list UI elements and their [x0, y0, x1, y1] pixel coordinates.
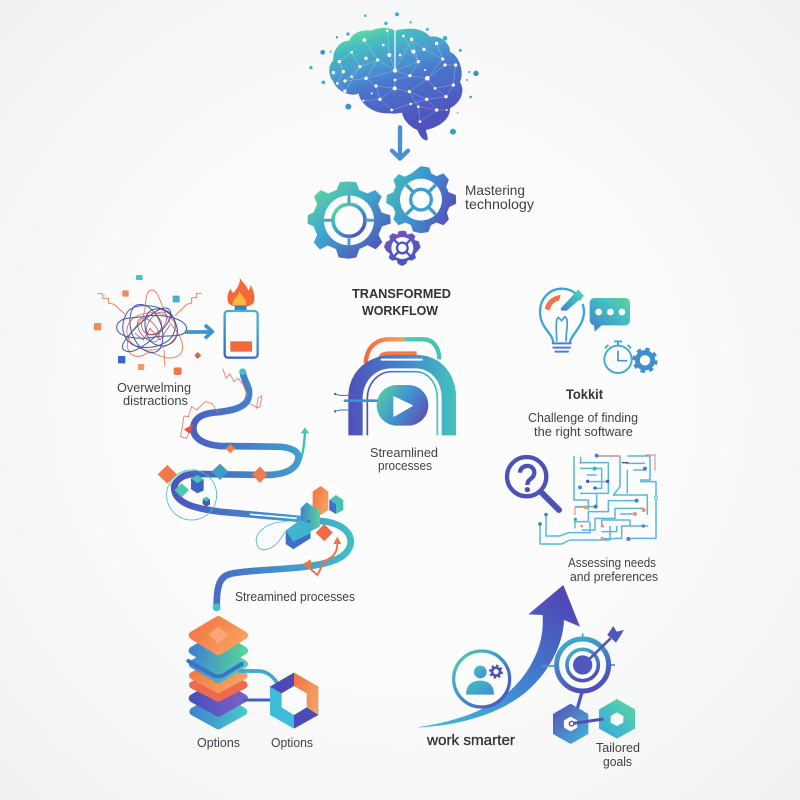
icon: tangled distractions: [94, 275, 212, 375]
text: tailored goals: goals: [603, 755, 632, 769]
connectors: [238, 671, 277, 683]
icon: person with gear badge: [454, 651, 510, 707]
text: overwhelming distractions: Overwelming: [117, 381, 191, 395]
icon: burning battery: [225, 276, 258, 358]
text: streamlined processes (centre): processes: [378, 459, 432, 473]
text: overwhelming distractions: distractions: [123, 394, 188, 408]
text: tokkit and challenge: Challenge of finding: [528, 411, 638, 425]
text: assessing needs and preferences: [568, 556, 658, 584]
text: options labels: Options: [197, 735, 240, 750]
arrow: brain to gears: [392, 127, 408, 159]
orange turn arrows: [304, 544, 337, 575]
icon: target with arrow: [542, 626, 624, 695]
medium gear: [387, 167, 456, 233]
icon: gears: [308, 167, 456, 266]
text: overwhelming distractions: [117, 381, 191, 408]
winding process road: [158, 368, 351, 611]
text: tailored goals: [596, 741, 640, 769]
icon: lightbulb, chat and timer: [540, 289, 656, 373]
satellite dots: [309, 12, 479, 135]
icon: rising arrow: [417, 585, 580, 727]
text: streamlined processes (centre): Streamlined: [370, 446, 438, 460]
building blocks: [256, 522, 287, 550]
icon: neural brain: [309, 12, 479, 140]
text: mastering technology: [465, 182, 534, 212]
small gear: [384, 231, 421, 266]
hexagon ring: [270, 673, 318, 729]
text: tokkit and challenge: the right software: [534, 425, 633, 439]
text: options labels: Options: [271, 735, 313, 750]
text: streamined processes: Streamined processes: [235, 589, 355, 604]
chat bubble: [590, 298, 630, 332]
diamonds: [158, 465, 177, 484]
icon: stacked option layers: [188, 620, 318, 729]
small gear: [637, 353, 653, 368]
red zigzag accents: [181, 368, 262, 438]
text: assessing needs and preferences: and preferences: [570, 570, 658, 584]
title: transformed workflow: [352, 287, 451, 318]
cube cluster and circles: [167, 470, 217, 520]
title: transformed workflow: TRANSFORMED: [352, 287, 451, 301]
title: transformed workflow: WORKFLOW: [362, 304, 438, 318]
text: tailored goals: Tailored: [596, 741, 640, 755]
stopwatch: [604, 346, 632, 373]
text: options labels: [197, 735, 313, 750]
text: work smarter: work smarter: [426, 732, 515, 749]
icon: streamlined process arch: [334, 339, 456, 435]
lightbulb: [540, 289, 584, 343]
arrow: tangle to battery: [185, 325, 212, 338]
text: tokkit and challenge: Tokkit: [566, 387, 603, 402]
text: mastering technology: Mastering: [465, 182, 525, 198]
text: mastering technology: technology: [465, 196, 534, 212]
icon: maze: [538, 454, 658, 544]
text: assessing needs and preferences: Assessing needs: [568, 556, 656, 570]
large gear: [308, 182, 390, 258]
text: tokkit and challenge: [528, 387, 638, 439]
icon: linked hexagons: [553, 693, 635, 744]
icon: magnifier with question mark: [507, 457, 559, 510]
text: streamlined processes (centre): [370, 446, 438, 473]
